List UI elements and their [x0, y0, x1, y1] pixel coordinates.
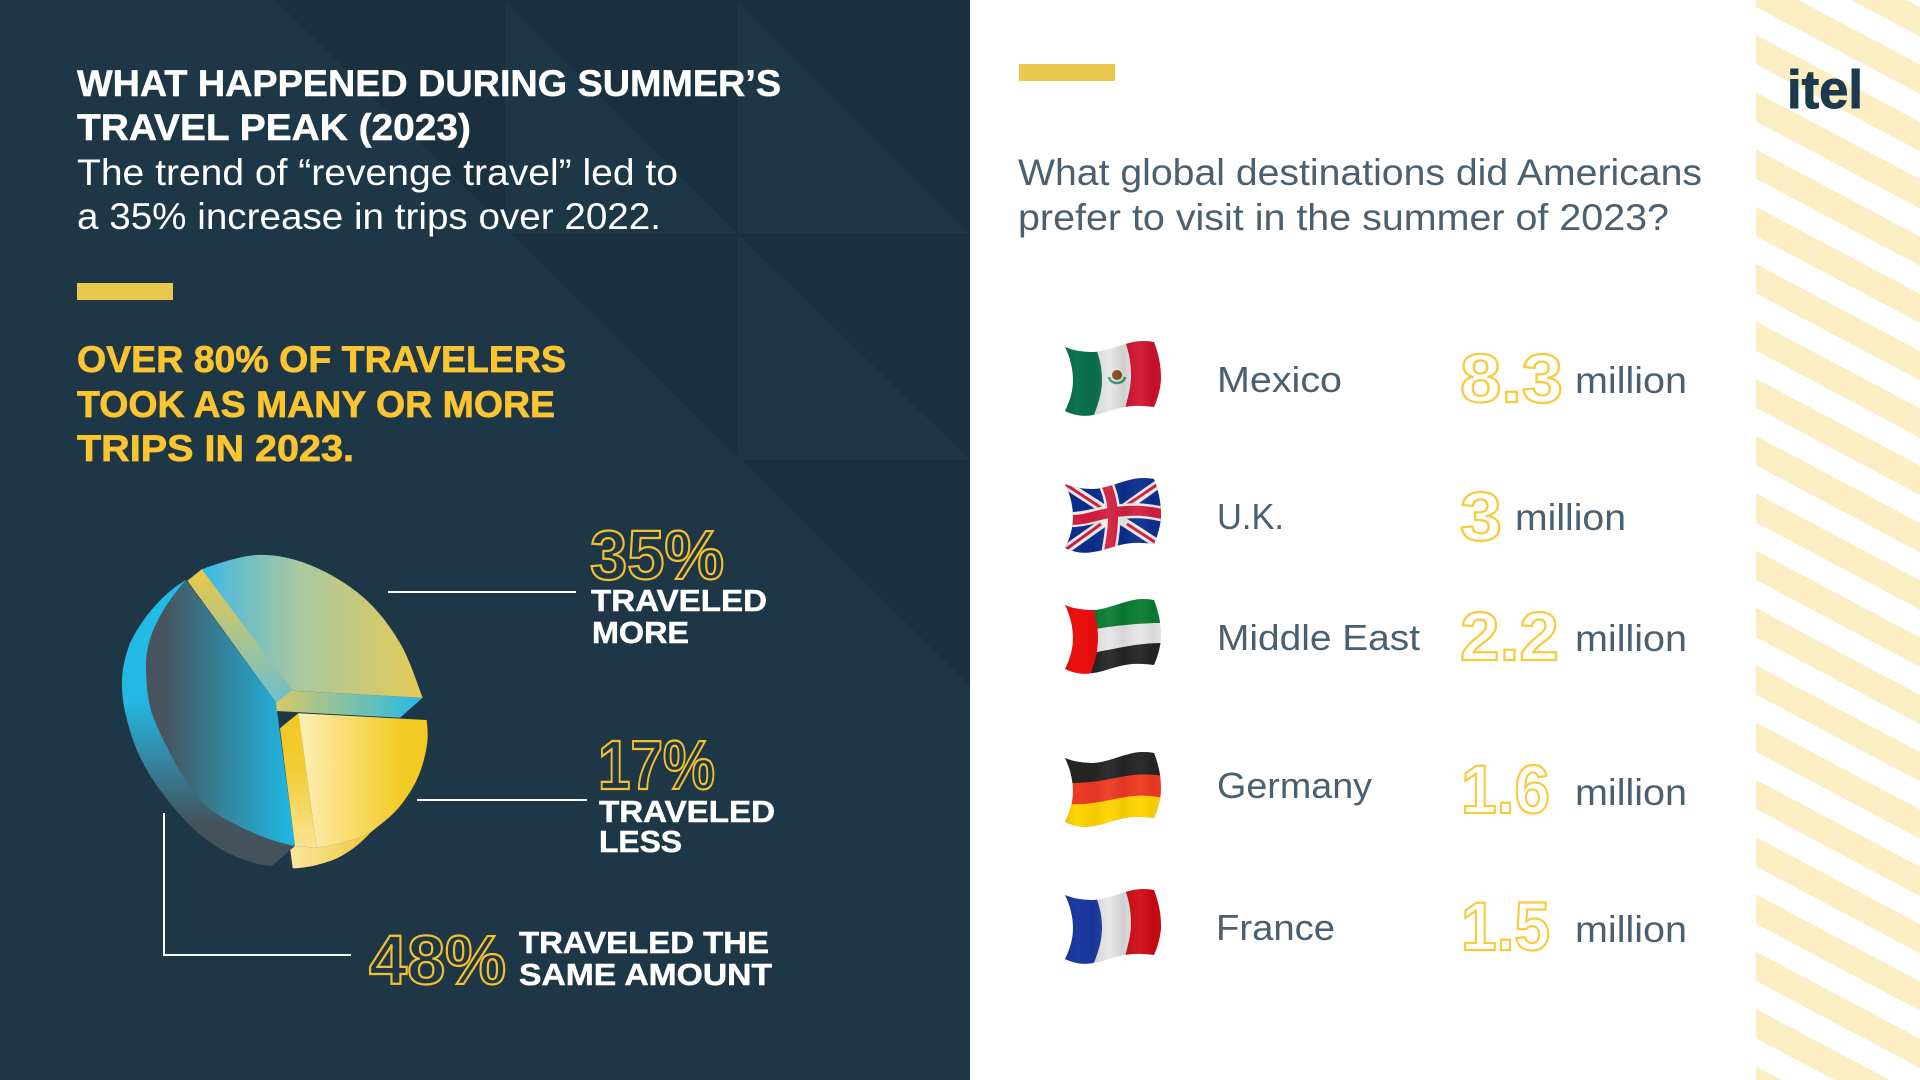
callout: 17% traveled less: 17%: [598, 726, 715, 804]
slice rim: 48%: [122, 580, 295, 866]
slice: 17% traveled less: [298, 713, 428, 848]
callout: 35% traveled more: 35%: [590, 516, 724, 594]
callout: 17% traveled less: LESS: [599, 824, 682, 859]
row: U.K.: U.K.: [1217, 496, 1284, 537]
text block: intro: [77, 152, 678, 237]
slice edge: 35% underside: [276, 691, 423, 718]
value: 1.6 million: [1461, 751, 1687, 828]
icon: flag of Mexico: [1063, 339, 1163, 417]
value: 8.3 million: [1460, 340, 1687, 417]
accent bar: right: [1019, 64, 1115, 81]
value: 1.5 million: 1.5: [1461, 888, 1550, 965]
row: Germany: [1063, 750, 1687, 830]
callout: 48% traveled the same amount: SAME AMOUNT: [519, 957, 772, 992]
value: 1.5 million: million: [1575, 909, 1687, 950]
heading: over 80% of travelers: [77, 339, 566, 469]
row: Germany: Germany: [1217, 765, 1372, 806]
title: WHAT HAPPENED DURING SUMMER’S: [77, 63, 781, 104]
callout: 35% traveled more: [388, 516, 767, 650]
row: France: [1063, 887, 1687, 965]
title: TRAVEL PEAK (2023): [77, 107, 471, 148]
row: Middle East: Middle East: [1217, 617, 1420, 658]
slice: 48% traveled the same: [146, 580, 295, 846]
callout: 48% traveled the same amount: [164, 813, 772, 999]
row: Mexico: Mexico: [1217, 359, 1342, 400]
row: France: France: [1216, 907, 1335, 948]
value: 8.3 million: 8.3: [1460, 340, 1563, 417]
icon: flag of the U.K.: [1065, 478, 1162, 554]
row: Mexico: [1063, 339, 1687, 417]
logo: itel: itel: [1787, 60, 1863, 120]
title: [77, 63, 781, 148]
icon: flag of Germany: [1063, 750, 1163, 830]
value: 1.5 million: [1461, 888, 1687, 965]
slice edge: 17% side: [280, 713, 317, 848]
value: 8.3 million: million: [1575, 360, 1687, 401]
panel: left dark background: [0, 0, 970, 1080]
icon: flag of the Middle East: [1063, 597, 1163, 677]
value: 1.6 million: million: [1575, 772, 1687, 813]
value: 2.2 million: million: [1575, 618, 1687, 659]
row: U.K.: [1065, 478, 1626, 555]
slice: 35% traveled more: [202, 555, 423, 698]
question heading: prefer to visit in the summer of 2023?: [1018, 197, 1669, 238]
heading: over 80% of travelers: TOOK AS MANY OR MORE: [77, 384, 555, 425]
value: 2.2 million: [1460, 598, 1687, 675]
value: 1.6 million: 1.6: [1461, 751, 1550, 828]
value: 3 million: 3: [1460, 478, 1502, 555]
callout: 17% traveled less: [417, 726, 775, 859]
slice edge: 35% side: [187, 569, 293, 703]
text block: intro: a 35% increase in trips over 2022.: [77, 196, 661, 237]
heading: over 80% of travelers: OVER 80% OF TRAVELERS: [77, 339, 566, 380]
chart: 3D pie: [122, 555, 428, 868]
slice edge: 17% bottom: [290, 833, 370, 868]
accent bar: left: [77, 283, 173, 300]
callout: 48% traveled the same amount: TRAVELED THE: [519, 925, 769, 960]
value: 3 million: million: [1515, 497, 1626, 538]
heading: over 80% of travelers: TRIPS IN 2023.: [77, 428, 354, 469]
callout: 48% traveled the same amount: 48%: [369, 921, 506, 999]
callout: 35% traveled more: MORE: [592, 615, 689, 650]
decorative stripes: [1756, 0, 1920, 1080]
row: Middle East: [1063, 597, 1687, 677]
callout: 17% traveled less: TRAVELED: [599, 794, 775, 829]
value: 2.2 million: 2.2: [1460, 598, 1559, 675]
callout: 35% traveled more: TRAVELED: [591, 583, 767, 618]
question heading: [1018, 152, 1702, 238]
value: 3 million: [1460, 478, 1626, 555]
text block: intro: The trend of “revenge travel” led to: [77, 152, 678, 193]
icon: flag of France: [1063, 887, 1163, 965]
question heading: What global destinations did Americans: [1018, 152, 1702, 193]
